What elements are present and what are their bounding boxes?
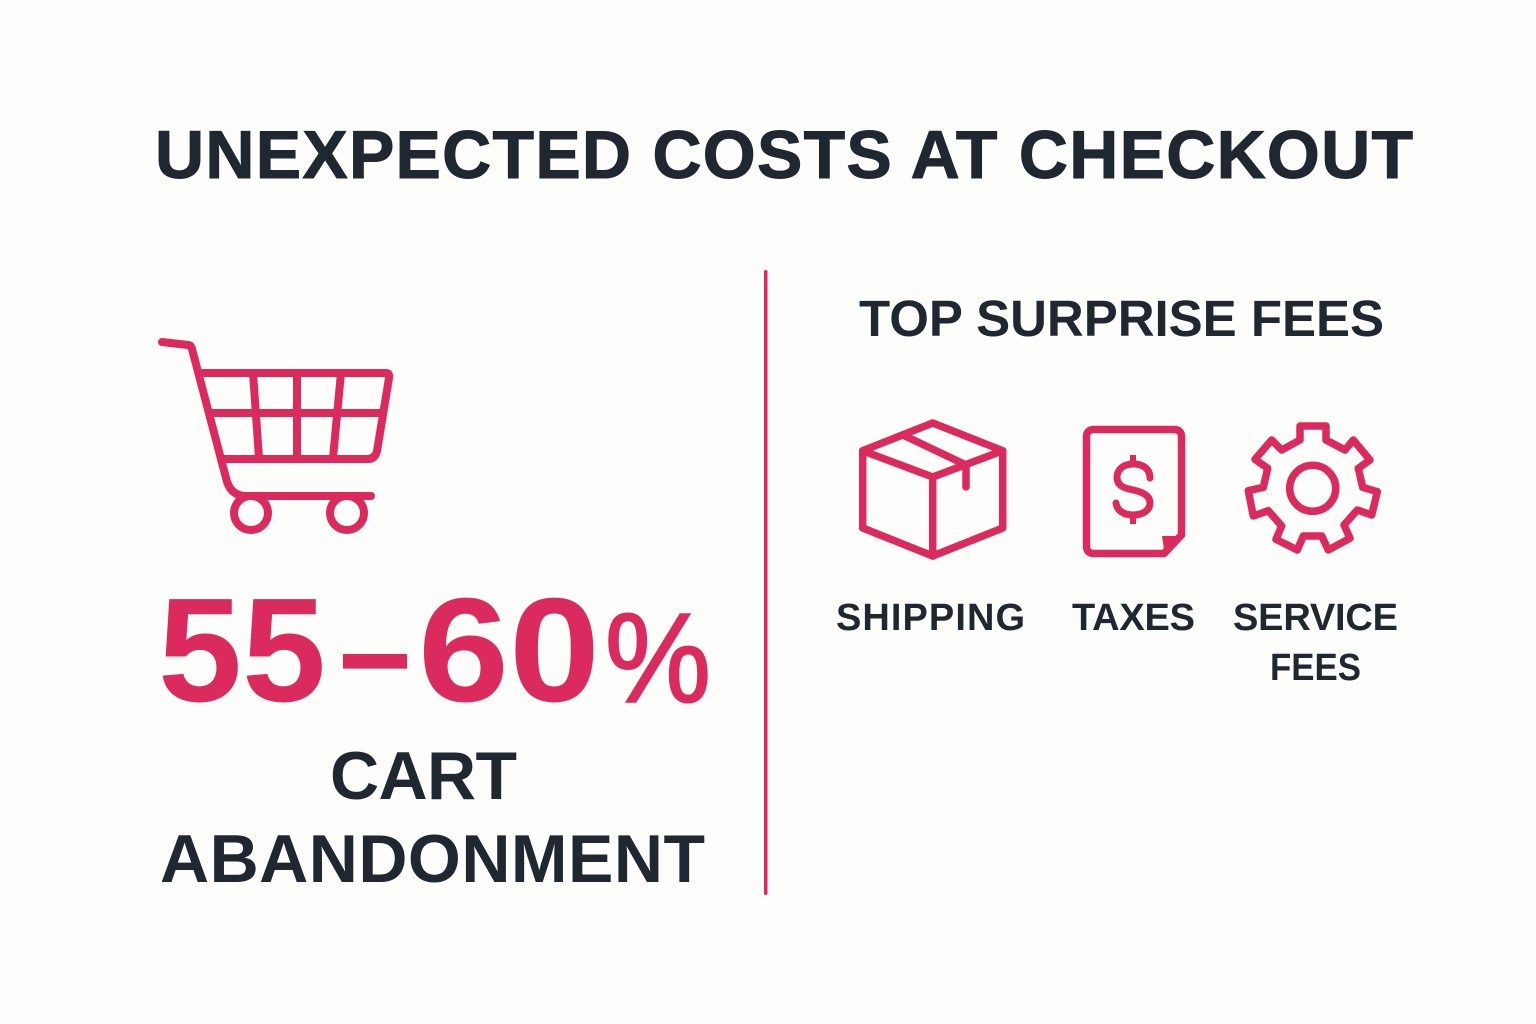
- divider line: [764, 270, 768, 895]
- statistic: 55–60%: 60: [418, 568, 600, 733]
- item: shipping: [836, 423, 1025, 639]
- panel: top surprise fees: [836, 290, 1398, 689]
- icon: tax document: [1086, 430, 1183, 556]
- label: service fees: FEES: [1270, 647, 1361, 689]
- statistic: 55–60%: –: [339, 568, 411, 733]
- icon: shopping cart: [162, 342, 389, 530]
- label: taxes: TAXES: [1072, 597, 1195, 639]
- statistic: 55–60%: 55: [158, 568, 326, 733]
- statistic: 55–60%: [158, 568, 711, 733]
- label: cart abandonment: ABANDONMENT: [160, 821, 705, 897]
- panel: cart abandonment: [158, 342, 711, 897]
- label: service fees: SERVICE: [1233, 597, 1398, 639]
- label: cart abandonment: CART: [330, 738, 517, 814]
- title: UNEXPECTED COSTS AT CHECKOUT: [155, 117, 1413, 193]
- label: service fees: [1233, 597, 1398, 689]
- statistic: 55–60%: %: [605, 587, 711, 729]
- heading: TOP SURPRISE FEES: [859, 290, 1384, 347]
- item: taxes: [1072, 430, 1195, 639]
- icon: gear: [1248, 426, 1377, 550]
- label: shipping: SHIPPING: [836, 597, 1025, 639]
- icon: box: [863, 423, 1003, 556]
- label: cart abandonment: [160, 738, 705, 897]
- item: service fees: [1233, 426, 1398, 689]
